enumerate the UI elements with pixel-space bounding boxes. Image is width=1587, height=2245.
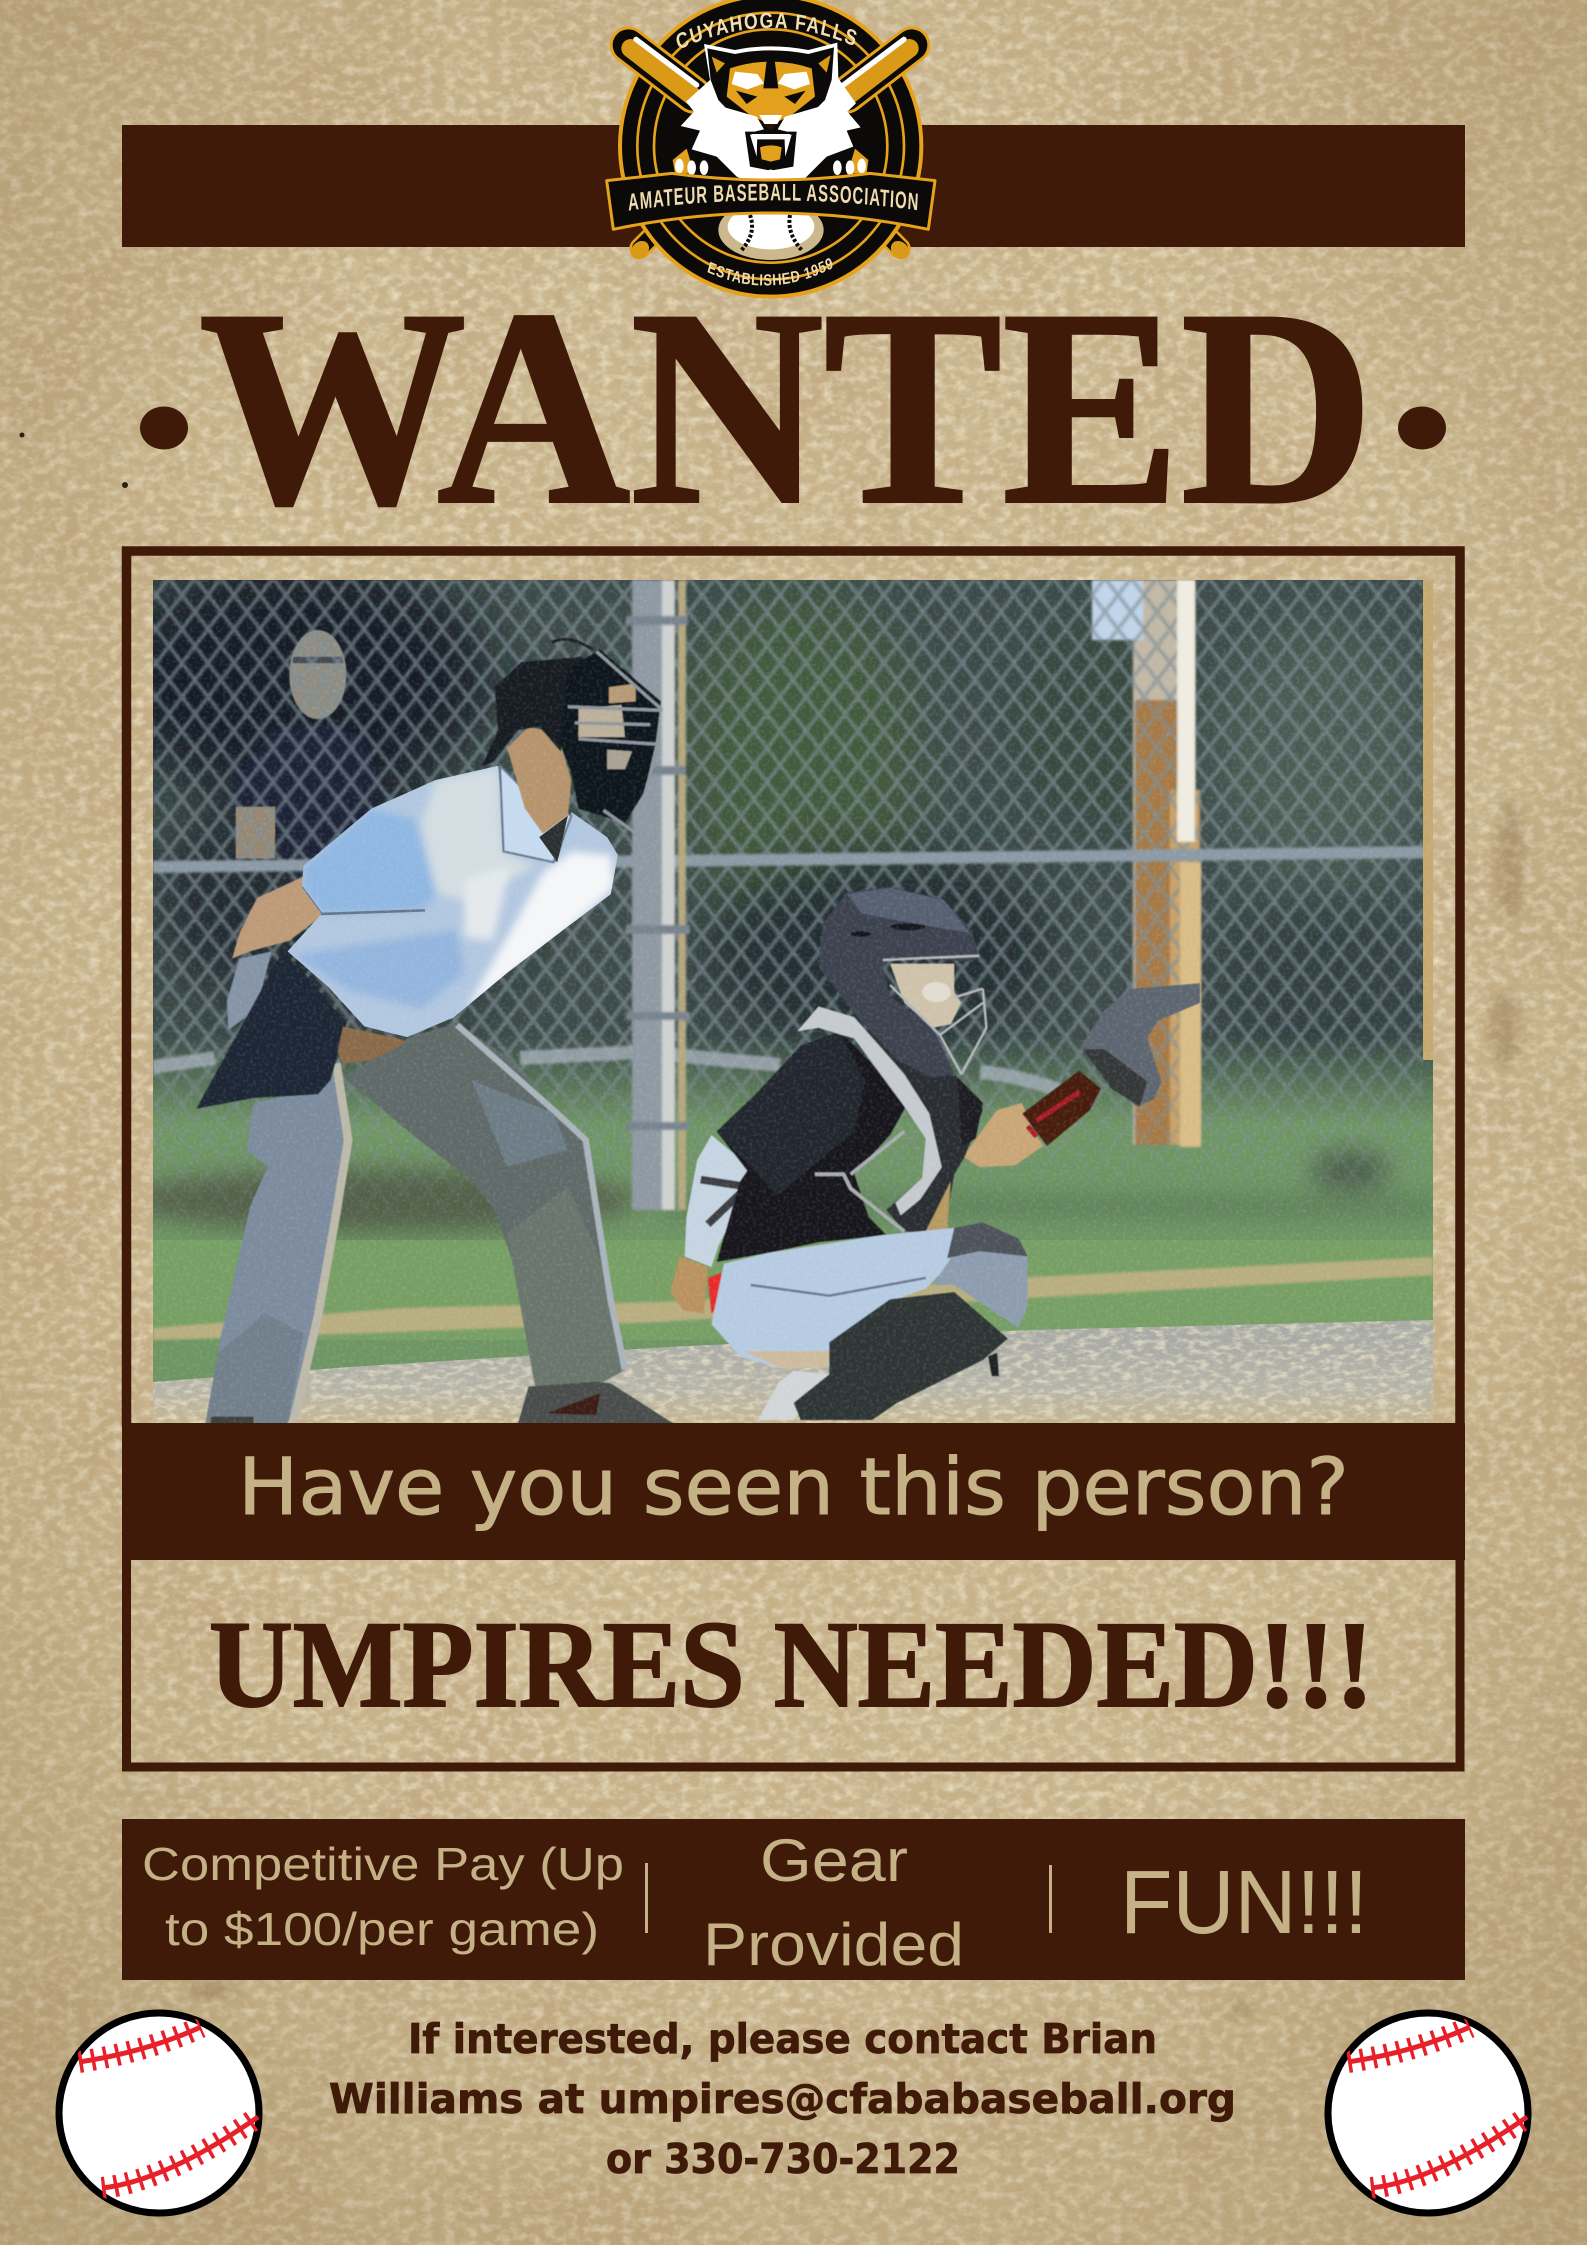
panel: benefits bar [122, 1819, 1465, 1980]
umpire: ball bag [196, 951, 346, 1109]
photo: spectator [236, 630, 384, 862]
benefit: competitive pay [142, 1838, 624, 1955]
title: WANTED: WANTED [199, 252, 1374, 562]
photo: umpire and catcher [110, 560, 1440, 1424]
umpire: cap [482, 657, 596, 766]
catcher: glove [1081, 983, 1200, 1106]
logo: bat barrels [628, 39, 912, 99]
panel: umpires needed [126, 1558, 1460, 1767]
benefit: fun: FUN!!! [1120, 1853, 1368, 1953]
contact text [329, 2015, 1236, 2183]
divider [1049, 1865, 1052, 1933]
catcher: shoe [758, 1371, 833, 1420]
photo: infield edge [153, 1257, 1433, 1340]
contact text: or 330-730-2122 [606, 2135, 960, 2183]
photo: catcher [670, 887, 1200, 1420]
photo: umpire upper body [196, 639, 662, 1109]
photo: rail and post [153, 580, 1433, 1210]
photo: wooden pole and sign [1092, 580, 1200, 1145]
umpire: left leg [205, 1057, 350, 1424]
catcher: sleeve [685, 1135, 754, 1267]
umpire: mask [552, 639, 662, 841]
catcher: hand [670, 1256, 708, 1314]
logo: paws [673, 149, 868, 175]
photo: right edge strip [1423, 580, 1433, 1060]
top banner bar [122, 125, 1465, 247]
logo: Cuyahoga Falls Amateur Baseball Association [605, 0, 936, 299]
benefit: gear provided: Gear [760, 1827, 908, 1894]
panel: umpires needed: UMPIRES NEEDED!!! [209, 1596, 1374, 1733]
umpire: hip [227, 951, 271, 1030]
catcher: helmet [819, 887, 979, 1078]
icon: baseball left [59, 2013, 259, 2213]
benefit: gear provided: Provided [703, 1911, 964, 1978]
catcher: knee guard [933, 1222, 1027, 1328]
catcher: shin guard [794, 1292, 1008, 1420]
logo: arc text: CUYAHOGA FALLS [676, 12, 856, 48]
contact text: Williams at umpires@cfababaseball.org [329, 2075, 1236, 2123]
logo: baseball [718, 200, 824, 260]
icon: baseball right [1328, 2013, 1528, 2213]
benefit: gear provided [703, 1827, 964, 1978]
benefit: competitive pay: to $100/per game) [165, 1903, 599, 1955]
photo: grass [153, 1035, 1433, 1125]
photo: umpire legs [205, 1023, 675, 1424]
catcher: red pocket [708, 1271, 731, 1314]
logo: badge circle [620, 0, 921, 297]
catcher: wrist band [1022, 1071, 1101, 1146]
contact text: If interested, please contact Brian [408, 2015, 1157, 2063]
umpire: arm [232, 876, 325, 959]
photo: background [110, 560, 1440, 1424]
logo: ribbon [607, 173, 935, 229]
umpire: belt [337, 1026, 407, 1064]
umpire: shoes [518, 1382, 675, 1424]
catcher: pants [711, 1228, 961, 1369]
band: Have you seen this person? [122, 1423, 1465, 1560]
divider [645, 1863, 648, 1933]
photo: chain-link fence [153, 580, 1423, 1260]
photo frame border [126, 551, 1460, 1426]
catcher: chest protector [869, 1031, 983, 1235]
benefit: competitive pay: Competitive Pay (Up [142, 1838, 624, 1890]
umpire: right leg [343, 1023, 625, 1390]
umpire: neck [507, 726, 571, 834]
photo: pole highlight [1177, 580, 1201, 1147]
catcher: face [890, 964, 961, 1028]
umpire: collar [500, 766, 571, 862]
logo: ribbon: AMATEUR BASEBALL ASSOCIATION [628, 184, 918, 211]
umpire: shirt [286, 759, 625, 1044]
logo: established text: ESTABLISHED 1959 [708, 258, 832, 286]
band: Have you seen this person?: Have you seen this person? [238, 1443, 1349, 1533]
logo: lower bat ends [627, 218, 913, 263]
catcher: cage [883, 956, 986, 1074]
logo: tiger head [681, 43, 861, 184]
catcher: jersey [717, 1031, 908, 1262]
catcher: arm [963, 1103, 1044, 1167]
photo: film grain [153, 580, 1433, 1423]
